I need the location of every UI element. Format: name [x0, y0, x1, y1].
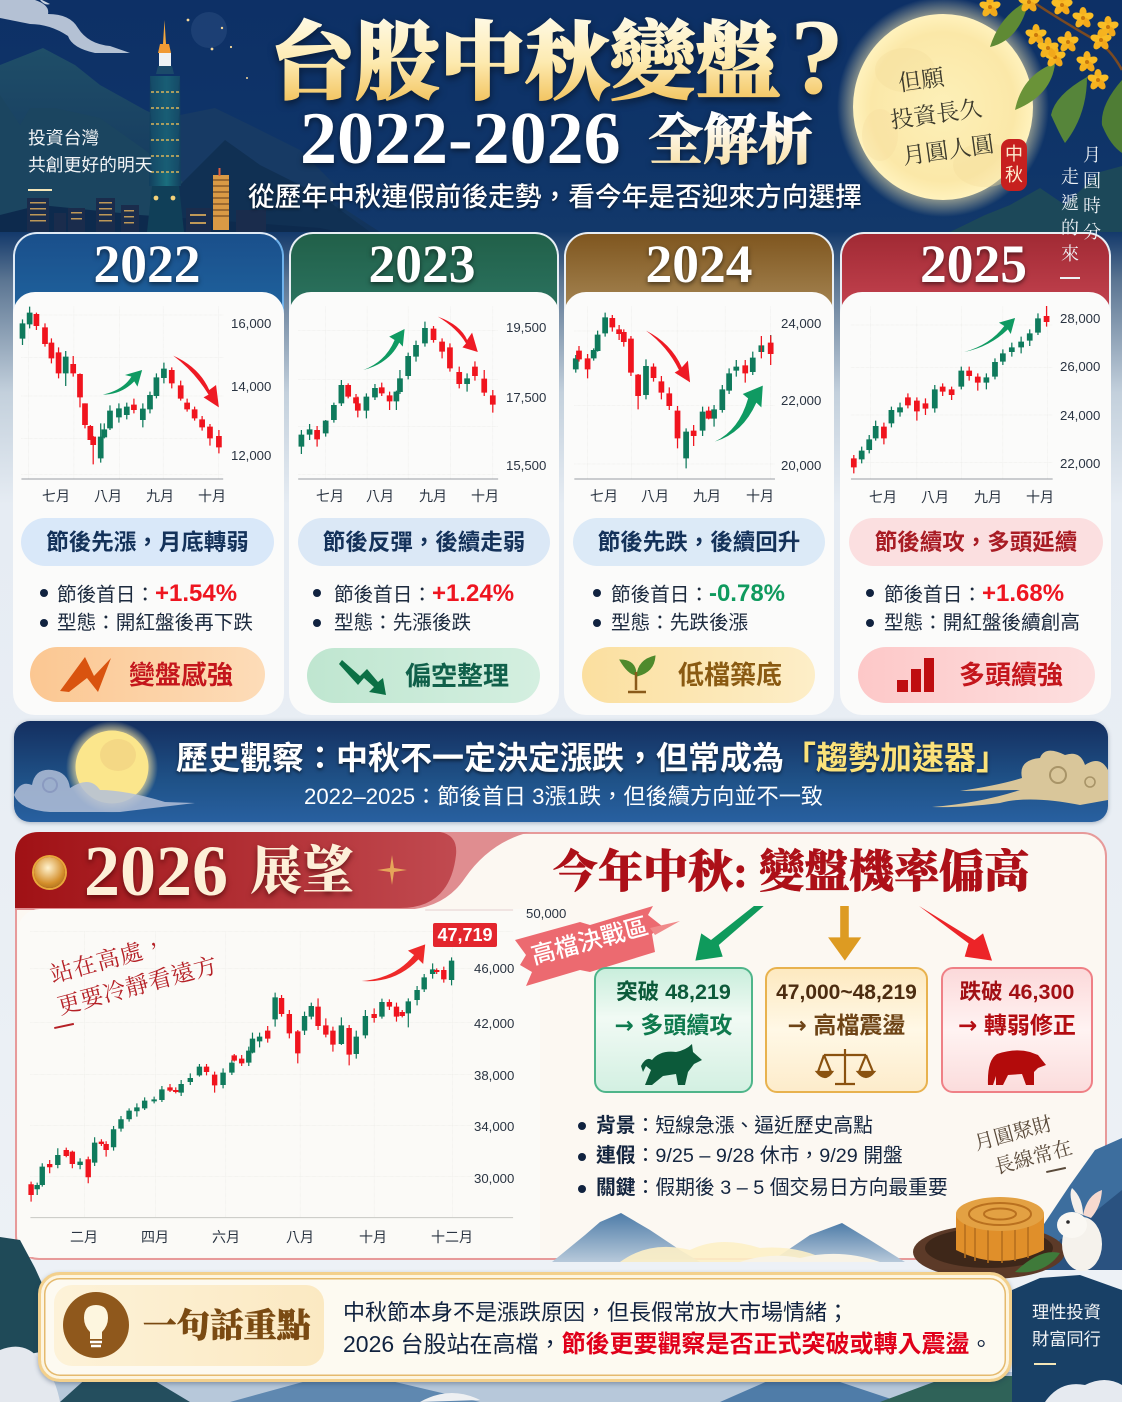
chart: 2025 candlesticks: 22,000 — [1060, 456, 1100, 471]
data bullets: 型態：先跌後漲 — [611, 612, 748, 634]
chart: 2025 candlesticks: 十月 — [1026, 489, 1054, 505]
data bullets — [313, 580, 514, 634]
chart: 2022 candlesticks: 16,000 — [231, 316, 271, 331]
chart: 2025 candlesticks: 26,000 — [1060, 359, 1100, 374]
chart: 2024 candlesticks: 九月 — [693, 488, 721, 504]
summary pill — [573, 518, 825, 566]
year heading: 2023 — [368, 234, 476, 294]
vertical poem: 時 — [1083, 192, 1101, 218]
chart: 2024 candlesticks: 24,000 — [781, 316, 821, 331]
badge: bottom building — [582, 647, 815, 703]
chart: 2023 candlesticks: 19,500 — [506, 320, 546, 335]
chart panel background — [18, 909, 540, 1257]
chart: 2025 candlesticks: 28,000 — [1060, 311, 1100, 326]
box: range scenario: → 高檔震盪 — [788, 1012, 905, 1039]
chart: 2024 candlesticks: 七月 — [590, 488, 618, 504]
vertical poem: 月 — [1083, 141, 1101, 167]
chart: 2026 taiex candlesticks: 38,000 — [474, 1068, 514, 1083]
seal: mid-autumn — [1001, 139, 1027, 191]
chart: 2022 candlesticks — [20, 306, 271, 504]
vertical poem: 走 — [1061, 163, 1079, 189]
chart: 2026 taiex candlesticks: 42,000 — [474, 1016, 514, 1031]
seal: mid-autumn: 秋 — [1005, 165, 1023, 185]
panel: 2022 — [13, 232, 559, 715]
list: background, holiday, key: 關鍵：假期後 3 – 5 個交易日方向最重要 — [596, 1177, 948, 1199]
summary pill: 節後先漲，月底轉弱 — [46, 530, 249, 555]
icon: gold ball — [34, 857, 65, 888]
data bullets: 型態：開紅盤後續創高 — [884, 612, 1080, 634]
data bullets: 節後首日：+1.24% — [334, 580, 514, 607]
chart: 2025 candlesticks: 七月 — [869, 489, 897, 505]
summary pill — [298, 518, 550, 566]
badge: volatile — [30, 647, 265, 702]
subtitle: year range — [300, 96, 813, 180]
handwritten note: wealth: 月圓聚財 — [970, 1107, 1055, 1156]
moon blessing text: 月圓人圓 — [900, 126, 996, 171]
right slogan — [1032, 1302, 1101, 1365]
subtitle: year range: 全解析 — [648, 96, 813, 175]
chart: 2026 taiex candlesticks: 46,000 — [474, 961, 514, 976]
badge: bottom building: 低檔築底 — [678, 660, 782, 690]
chart: 2026 taiex candlesticks: 30,000 — [474, 1171, 514, 1186]
panel: 2026 outlook — [15, 832, 1107, 1260]
badge: bearish consolidation: 偏空整理 — [405, 661, 509, 691]
year heading: 2025 — [920, 234, 1027, 294]
vertical poem — [1060, 141, 1101, 279]
box: range scenario: 47,000~48,219 — [776, 981, 917, 1004]
summary pill — [21, 518, 274, 566]
brush label: high zone battle — [515, 906, 680, 986]
icon: golden cloud — [932, 750, 1108, 808]
chart: 2024 candlesticks: 八月 — [641, 488, 669, 504]
chart: 2026 taiex candlesticks: 50,000 — [526, 906, 566, 921]
takeaway text: 中秋節本身不是漲跌原因，但長假常放大市場情緒； — [343, 1300, 849, 1325]
chart: 2025 candlesticks: 九月 — [974, 489, 1002, 505]
left slogan: 共創更好的明天 — [28, 155, 152, 175]
heading: 2026 outlook: 展望 — [250, 829, 354, 904]
vertical poem: 的 — [1061, 214, 1079, 240]
data bullets — [866, 580, 1080, 634]
chart: 2023 candlesticks: 十月 — [471, 488, 499, 504]
icon: bull — [641, 1044, 702, 1085]
box: bear scenario: → 轉弱修正 — [958, 1012, 1076, 1039]
box: bull scenario: → 多頭續攻 — [615, 1012, 732, 1039]
icon: scale — [814, 1049, 876, 1086]
chart: 2022 candlesticks: 12,000 — [231, 448, 271, 463]
icon: moon and clouds — [14, 722, 194, 812]
vertical poem: 遞 — [1061, 188, 1079, 214]
handwritten note: stand high — [46, 927, 221, 1029]
panel header: red swoosh — [15, 832, 529, 910]
chart: 2022 candlesticks: 七月 — [42, 488, 70, 504]
box: range scenario — [765, 967, 928, 1093]
year heading: 2022 — [94, 234, 200, 294]
right slogan: 理性投資 — [1032, 1302, 1101, 1322]
chart: 2026 taiex candlesticks: 六月 — [212, 1229, 240, 1245]
chart: 2024 candlesticks: 22,000 — [781, 393, 821, 408]
chart: 2024 candlesticks — [572, 306, 821, 504]
chart: 2023 candlesticks: 八月 — [366, 488, 394, 504]
data bullets: 型態：開紅盤後再下跌 — [57, 612, 253, 634]
heading: high reversal odds: 今年中秋: 變盤機率偏高 — [553, 847, 1029, 897]
chart: 2022 candlesticks: 八月 — [94, 488, 122, 504]
banner: historical observation — [14, 721, 1108, 822]
chart: 2022 candlesticks: 九月 — [146, 488, 174, 504]
chart: 2026 taiex candlesticks: 十月 — [359, 1229, 387, 1245]
handwritten note: stand high: 站在高處， — [46, 927, 170, 989]
handwritten note: stand high: 更要冷靜看遠方 — [53, 947, 221, 1021]
data bullets: 節後首日：+1.68% — [884, 580, 1064, 607]
list: background, holiday, key — [578, 1114, 948, 1199]
banner subtext: 2022–2025：節後首日 3漲1跌，但後續方向並不一致 — [304, 784, 823, 809]
list: background, holiday, key: 背景：短線急漲、逼近歷史高點 — [596, 1115, 873, 1137]
chart: 2025 candlesticks: 八月 — [921, 489, 949, 505]
handwritten note: wealth — [970, 1107, 1075, 1180]
title: ? — [790, 0, 844, 117]
vertical poem: 分 — [1083, 218, 1101, 244]
heading: 2026 outlook: 2026 — [84, 831, 228, 911]
left slogan: 投資台灣 — [28, 128, 99, 148]
right slogan: 財富同行 — [1032, 1329, 1101, 1349]
chart: 2026 taiex candlesticks: 十二月 — [431, 1229, 473, 1245]
chart: 2026 taiex candlesticks — [28, 906, 566, 1245]
price tag: 47,719: 47,719 — [437, 925, 493, 945]
chart: 2022 candlesticks: 14,000 — [231, 379, 271, 394]
subtitle: year range: 2022-2026 — [300, 98, 621, 180]
takeaway text — [343, 1300, 993, 1358]
summary pill: 節後續攻，多頭延續 — [875, 530, 1077, 555]
summary pill: 節後反彈，後續走弱 — [323, 530, 525, 555]
brush label: high zone battle: 高檔決戰區 — [528, 913, 651, 970]
moon blessing text: 但願 — [896, 59, 946, 98]
box: bear scenario — [941, 967, 1093, 1093]
chart: 2026 taiex candlesticks: 四月 — [141, 1229, 169, 1245]
panel: 2024 — [46, 232, 1111, 960]
moon blessing text: 投資長久 — [888, 90, 984, 135]
chart: 2026 taiex candlesticks: 二月 — [70, 1229, 98, 1245]
moon blessing text — [888, 59, 996, 171]
year heading: 2024 — [646, 234, 752, 294]
summary pill — [849, 518, 1103, 566]
data bullets: 節後首日：+1.54% — [57, 580, 237, 607]
chart: 2023 candlesticks: 15,500 — [506, 458, 546, 473]
chart: 2023 candlesticks — [298, 306, 546, 504]
summary pill: 節後先跌，後續回升 — [598, 530, 800, 555]
vertical poem: 來 — [1061, 240, 1079, 266]
takeaway text: 2026 台股站在高檔，節後更要觀察是否正式突破或轉入震盪。 — [343, 1331, 993, 1358]
vertical poem: 圓 — [1083, 166, 1101, 192]
box: bear scenario: 跌破 46,300 — [960, 980, 1074, 1004]
data bullets — [40, 580, 253, 634]
banner heading: 歷史觀察：中秋不一定決定漲跌，但常成為「趨勢加速器」 — [176, 740, 1008, 776]
scenario arrows — [695, 906, 992, 961]
handwritten note: wealth: 長線常在 — [990, 1131, 1075, 1180]
badge: volatile: 變盤感強 — [129, 660, 233, 690]
panel: 2025 — [46, 232, 1111, 1026]
takeaway label: 一句話重點 — [143, 1308, 310, 1345]
heading: 2026 outlook — [84, 829, 354, 911]
data bullets — [593, 580, 785, 634]
takeaway label chip — [54, 1285, 324, 1366]
chart: 2022 candlesticks: 十月 — [198, 488, 226, 504]
icon: taipei 101 tower — [147, 20, 184, 232]
list: background, holiday, key: 連假：9/25 – 9/28 休市，9/29 開盤 — [596, 1145, 903, 1167]
chart: 2025 candlesticks: 24,000 — [1060, 408, 1100, 423]
badge: bearish consolidation — [307, 648, 540, 703]
tagline: 從歷年中秋連假前後走勢，看今年是否迎來方向選擇 — [248, 182, 862, 212]
badge: bullish: 多頭續強 — [959, 660, 1063, 690]
chart: 2023 candlesticks: 七月 — [316, 488, 344, 504]
icon: bear — [988, 1050, 1046, 1085]
data bullets: 節後首日：-0.78% — [611, 580, 785, 607]
chart: 2026 taiex candlesticks: 34,000 — [474, 1119, 514, 1134]
chart: 2024 candlesticks: 20,000 — [781, 458, 821, 473]
chart: 2023 candlesticks: 九月 — [419, 488, 447, 504]
seal: mid-autumn: 中 — [1005, 144, 1023, 164]
box: bull scenario — [594, 967, 753, 1093]
box: bull scenario: 突破 48,219 — [616, 980, 731, 1004]
chart: 2023 candlesticks: 17,500 — [506, 390, 546, 405]
icon: full moon — [838, 0, 1048, 216]
badge: bullish — [858, 647, 1095, 703]
data bullets: 型態：先漲後跌 — [334, 612, 471, 634]
panel: one-line takeaway — [38, 1272, 1012, 1382]
chart: 2024 candlesticks: 十月 — [746, 488, 774, 504]
chart: 2026 taiex candlesticks: 八月 — [286, 1229, 314, 1245]
icon: osmanthus branch — [980, 0, 1122, 153]
panel: 2023 — [289, 232, 834, 715]
chart: 2025 candlesticks — [850, 306, 1100, 505]
left slogan — [28, 128, 152, 191]
